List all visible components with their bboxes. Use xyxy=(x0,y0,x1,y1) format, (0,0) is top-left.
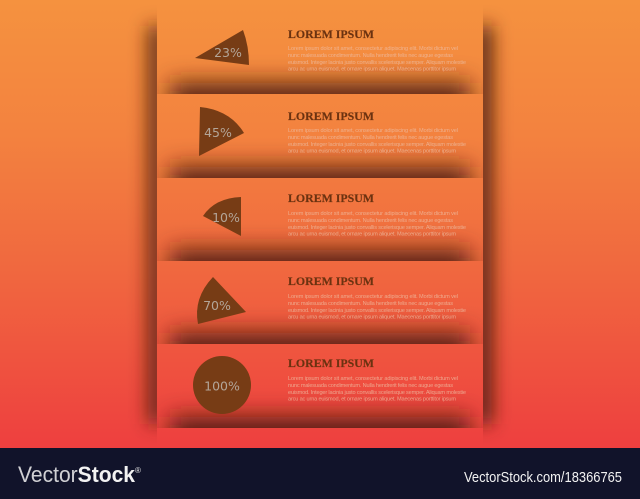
text block: arcu ac urna euismod, et ornare ipsum aliquet. Maecenas porttitor ipsum xyxy=(288,148,456,154)
panel: row 2, 45% xyxy=(157,107,483,178)
icon: pie wedge 45% xyxy=(199,107,244,156)
text block: Lorem ipsum dolor sit amet, consectetur adipiscing elit. Morbi dictum vel xyxy=(288,294,458,300)
heading: LOREM IPSUM xyxy=(288,29,374,41)
heading: LOREM IPSUM xyxy=(288,358,374,370)
text block: euismod. Integer lacinia justo convallis scelerisque semper. Aliquam molestie xyxy=(288,142,466,148)
icon: pie wedge 10% xyxy=(203,197,241,236)
footer url: VectorStock.com/18366765 xyxy=(464,470,622,486)
logo: VectorStock: VectorStock xyxy=(18,462,135,487)
panel: row 1, 23% xyxy=(157,30,483,94)
icon: full circle 100% xyxy=(193,356,251,414)
icon: pie wedge 23% xyxy=(195,30,249,65)
text block: euismod. Integer lacinia justo convallis scelerisque semper. Aliquam molestie xyxy=(288,60,466,66)
panel: row 4, 70% xyxy=(157,277,483,344)
text block: arcu ac urna euismod, et ornare ipsum aliquet. Maecenas porttitor ipsum xyxy=(288,232,456,238)
label: 70%: 70% xyxy=(203,298,231,313)
label: 100%: 100% xyxy=(204,378,240,394)
text block: Lorem ipsum dolor sit amet, consectetur adipiscing elit. Morbi dictum vel xyxy=(288,211,458,217)
panel: row 3, 10% xyxy=(157,194,483,261)
panel: row 5, 100% xyxy=(157,356,483,428)
text block: nunc malesuada condimentum. Nulla hendrerit felis nec augue egestas xyxy=(288,53,453,59)
text block: nunc malesuada condimentum. Nulla hendrerit felis nec augue egestas xyxy=(288,383,453,389)
text block: Lorem ipsum dolor sit amet, consectetur adipiscing elit. Morbi dictum vel xyxy=(288,376,458,382)
right side shadow xyxy=(474,26,492,424)
text block: euismod. Integer lacinia justo convallis scelerisque semper. Aliquam molestie xyxy=(288,308,466,314)
left side shadow xyxy=(148,26,166,424)
label: 23%: 23% xyxy=(214,45,242,60)
label: 45%: 45% xyxy=(204,125,232,140)
label: 10%: 10% xyxy=(212,210,240,225)
heading: LOREM IPSUM xyxy=(288,193,374,205)
text block: arcu ac urna euismod, et ornare ipsum aliquet. Maecenas porttitor ipsum xyxy=(288,396,456,402)
text block: euismod. Integer lacinia justo convallis scelerisque semper. Aliquam molestie xyxy=(288,225,466,231)
text block: nunc malesuada condimentum. Nulla hendrerit felis nec augue egestas xyxy=(288,218,453,224)
text block: euismod. Integer lacinia justo convallis scelerisque semper. Aliquam molestie xyxy=(288,390,466,396)
text block: nunc malesuada condimentum. Nulla hendrerit felis nec augue egestas xyxy=(288,135,453,141)
icon: pie wedge 70% xyxy=(197,277,246,324)
text block: nunc malesuada condimentum. Nulla hendrerit felis nec augue egestas xyxy=(288,301,453,307)
text block: arcu ac urna euismod, et ornare ipsum aliquet. Maecenas porttitor ipsum xyxy=(288,314,456,320)
heading: LOREM IPSUM xyxy=(288,111,374,123)
text block: Lorem ipsum dolor sit amet, consectetur adipiscing elit. Morbi dictum vel xyxy=(288,128,458,134)
heading: LOREM IPSUM xyxy=(288,276,374,288)
logo: registered mark: ® xyxy=(135,466,141,475)
text block: Lorem ipsum dolor sit amet, consectetur adipiscing elit. Morbi dictum vel xyxy=(288,46,458,52)
text block: arcu ac urna euismod, et ornare ipsum aliquet. Maecenas porttitor ipsum xyxy=(288,66,456,72)
footer bar xyxy=(0,448,640,499)
